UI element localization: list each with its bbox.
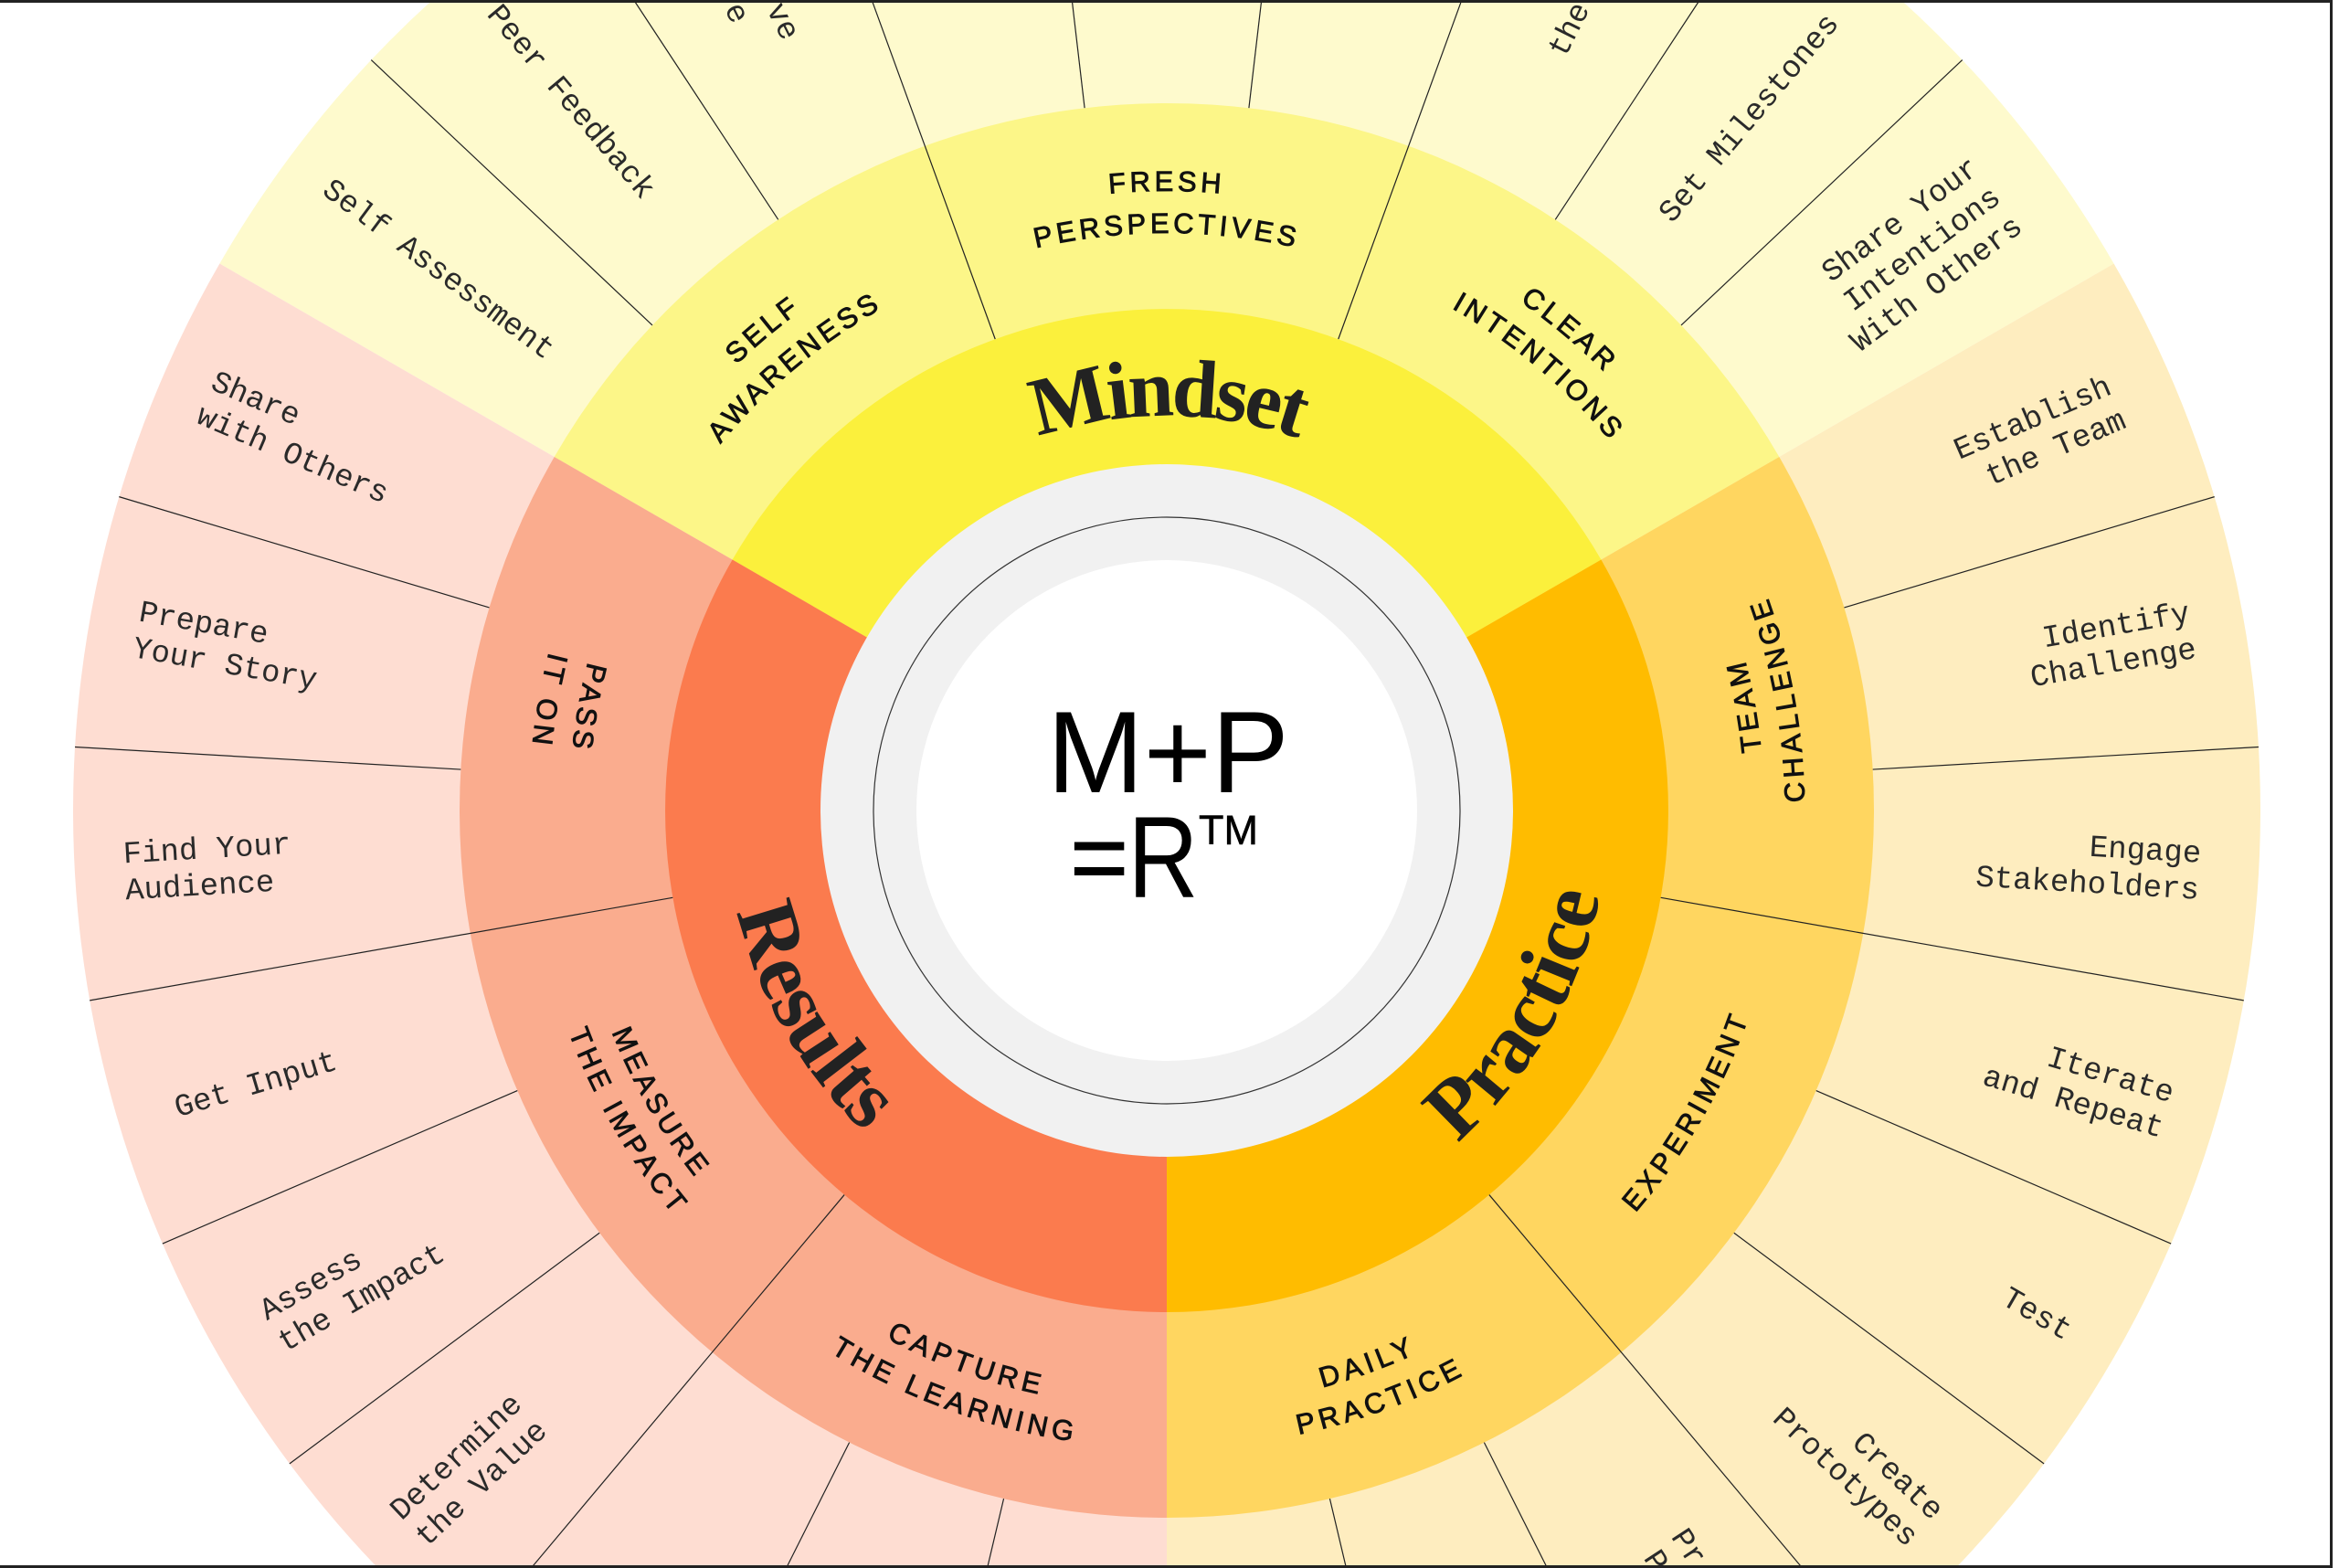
item: Share Your Intentions With Others (1802, 152, 2030, 361)
heading: Results: Results (736, 897, 888, 1127)
outer ring: Mindset actions (219, 0, 2114, 810)
theme: Daily Practice: PRACTICE (1296, 1358, 1462, 1435)
inner ring: Practice (1167, 559, 1668, 1312)
theme: Fresh Perspectives (1033, 171, 1296, 249)
theme: Measure the Impact: MEASURE (612, 1025, 710, 1177)
item: Iterate and Repeat: Iterate (2043, 1042, 2177, 1112)
item: Establish the Team: Establish (1950, 371, 2117, 469)
theme: Clear Intentions: CLEAR (1524, 289, 1614, 372)
middle ring: Practice themes (1167, 457, 1874, 1518)
item: clipped label at bottom (1633, 1523, 1711, 1568)
item: Find Your Audience: Find Your (122, 829, 291, 873)
item: Establish the Team (1950, 371, 2132, 503)
item: Share with Others: Share (206, 366, 305, 435)
item: clipped label at top left (715, 0, 805, 63)
item: Engage Stakeholders: Engage (2089, 832, 2202, 873)
theme: Capture the Learning: CAPTURE (890, 1323, 1042, 1394)
item: Get Input: Get Input (171, 1045, 342, 1127)
theme: Clear Intentions: INTENTIONS (1453, 292, 1622, 437)
hub formula: M+P=R: = (1070, 801, 1128, 914)
theme: Measure the Impact: THE IMPACT (570, 1025, 689, 1209)
item: Share with Others: with Others (191, 399, 393, 513)
inner ring: Mindset (733, 309, 1601, 810)
theme: Daily Practice: DAILY (1318, 1336, 1407, 1387)
white hub (916, 560, 1417, 1061)
item: Find Your Audience: Audience (124, 866, 275, 909)
grey hub ring (820, 464, 1513, 1157)
item: Engage Stakeholders: Stakeholders (1974, 862, 2200, 909)
theme: Fresh Perspectives: FRESH (1109, 171, 1221, 194)
item: Prepare Your Story (130, 597, 326, 699)
theme: Pass It On: IT ON (532, 654, 568, 744)
theme: Team Challenge: CHALLENGE (1750, 599, 1805, 802)
hub formula: M+P=R: TM (1199, 807, 1258, 853)
item: Create Prototypes: Create (1844, 1426, 1949, 1529)
theme: Fresh Perspectives: PERSPECTIVES (1033, 213, 1296, 249)
inner ring: Results (665, 559, 1167, 1312)
item: Establish the Team: the Team (1981, 404, 2132, 495)
item: Self Assessment: Self Assessment (315, 174, 560, 368)
item: Share Your Intentions With Others: Share Your (1816, 152, 1986, 291)
heading: Mindset: Mindset (1026, 360, 1308, 437)
theme: Pass It On (532, 654, 607, 748)
theme: Self Awareness: AWARENESS (710, 294, 877, 445)
item: Identify Challenge (2022, 598, 2199, 696)
hub formula: M+P=R: M+P (1047, 687, 1289, 817)
theme: Pass It On: PASS (572, 663, 607, 748)
heading: Practice: Practice (1420, 892, 1599, 1142)
middle ring: Results themes (460, 457, 1167, 1518)
item: Prepare Your Story: Your Story (130, 632, 320, 699)
item: Prepare Your Story: Prepare (136, 597, 270, 653)
thin hub circle (873, 517, 1460, 1104)
item: Set Milestones: Set Milestones (1653, 8, 1847, 230)
item: Assess the Impact: Assess (255, 1244, 369, 1330)
theme: Self Awareness: SELF (725, 296, 795, 362)
outer ring: Results actions (73, 263, 1167, 1568)
hub formula: M+P=R (1047, 687, 1289, 922)
item: Iterate and Repeat: and Repeat (1978, 1060, 2167, 1147)
item: Identify Challenge: Identify (2040, 598, 2193, 657)
theme: Capture the Learning: THE LEARNING (835, 1335, 1073, 1440)
item: Share Your Intentions With Others: Intentions (1838, 181, 2008, 320)
item: Iterate and Repeat (1978, 1025, 2177, 1147)
item: Determine the Value: Determine (385, 1388, 531, 1529)
item: Create Prototypes: Prototypes (1764, 1402, 1924, 1555)
middle ring: Mindset themes (555, 103, 1779, 810)
theme: Team Challenge: TEAM (1727, 662, 1762, 754)
hub formula: M+P=R: R (1127, 792, 1199, 922)
outer ring: Practice actions (1167, 263, 2260, 1568)
item: Assess the Impact: the Impact (273, 1237, 451, 1361)
item: Engage Stakeholders (1974, 825, 2202, 909)
item: Test: Test (1995, 1282, 2077, 1350)
item: Determine the Value: the Value (409, 1414, 556, 1555)
item: Peer Feedback: Peer Feedback (479, 0, 661, 207)
theme: Experiment: EXPERIMENT (1621, 1012, 1746, 1212)
item: Find Your Audience (122, 829, 294, 909)
item: Share Your Intentions With Others: With Others (1845, 210, 2030, 361)
item: Identify Challenge: Challenge (2028, 633, 2199, 696)
